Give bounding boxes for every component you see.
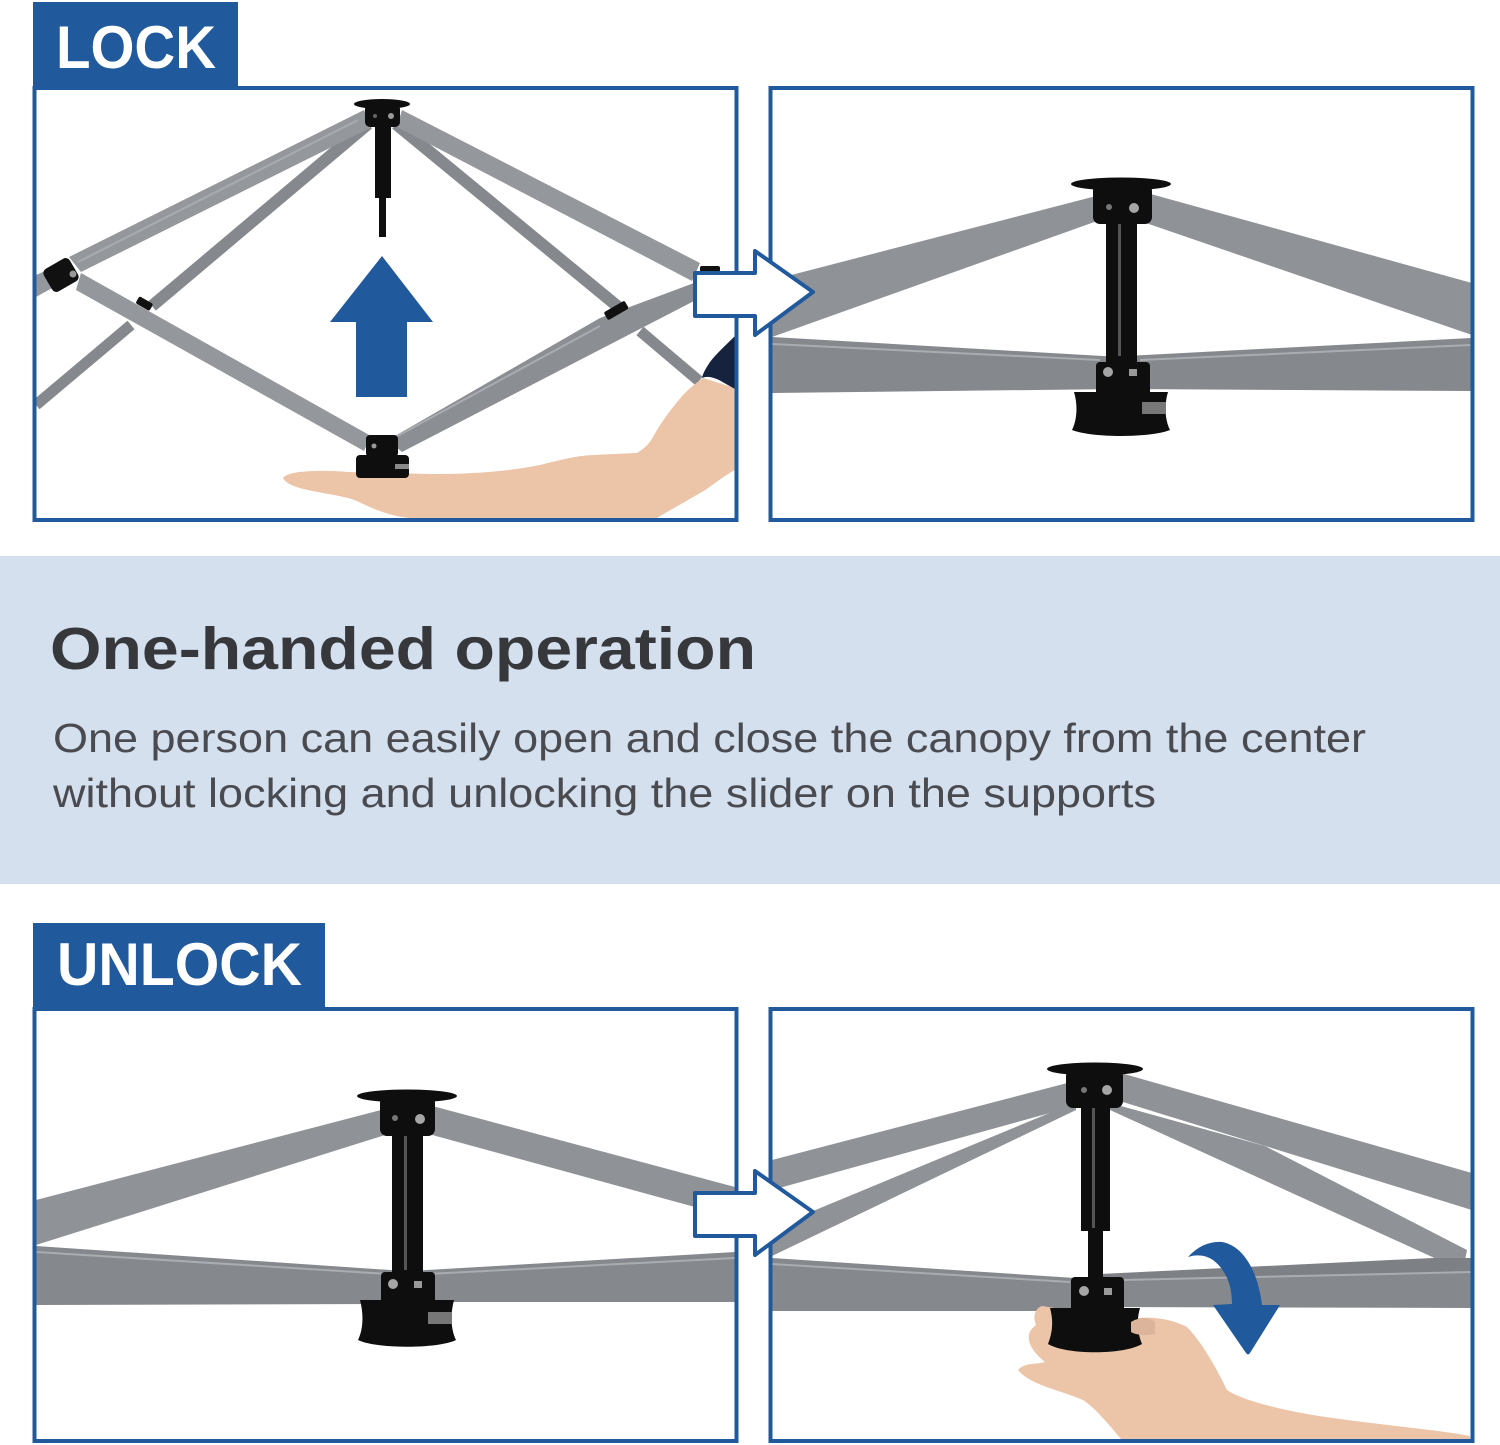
frame [34,88,736,520]
hub and shaft [1071,178,1171,436]
left joint [43,258,79,292]
panel: unlock step 2 [770,1009,1472,1441]
frame [770,88,1472,520]
panel: lock step 2 [770,88,1472,520]
frame beams: unlock step 1 [36,1104,735,1305]
frame beams: unlock step 2 [772,1070,1472,1311]
arm and hand [283,378,735,518]
arm and hand [1018,1306,1470,1439]
tab: lock [33,2,238,88]
frame [770,1009,1472,1441]
body text: without locking and unlocking the slider on the supports [52,770,1156,816]
frame beams: lock step 2 [772,191,1472,393]
thumb [1131,1318,1155,1335]
bottom hub [356,435,409,478]
panel: unlock step 1 [34,1009,736,1441]
body text: One person can easily open and close the canopy from the center [53,715,1366,761]
hub and shaft [357,1090,457,1347]
hub and shaft [1047,1062,1143,1352]
arrow: lock step [695,251,813,335]
strut joints [135,266,720,320]
icon: curved rotation arrow [1188,1242,1280,1354]
frame beams: lock step 1 [36,110,700,452]
sleeve [702,336,735,389]
panel: lock step 1 [34,88,736,520]
tab: unlock: UNLOCK [57,931,302,998]
tab: lock: LOCK [56,14,216,81]
top hub [354,99,410,237]
tab: unlock [33,923,325,1008]
arrow: unlock step [695,1171,813,1255]
heading: One-handed operation [50,616,756,682]
body text [52,715,1366,816]
icon: up arrow [330,256,433,397]
frame [34,1009,736,1441]
band: description [0,556,1500,884]
